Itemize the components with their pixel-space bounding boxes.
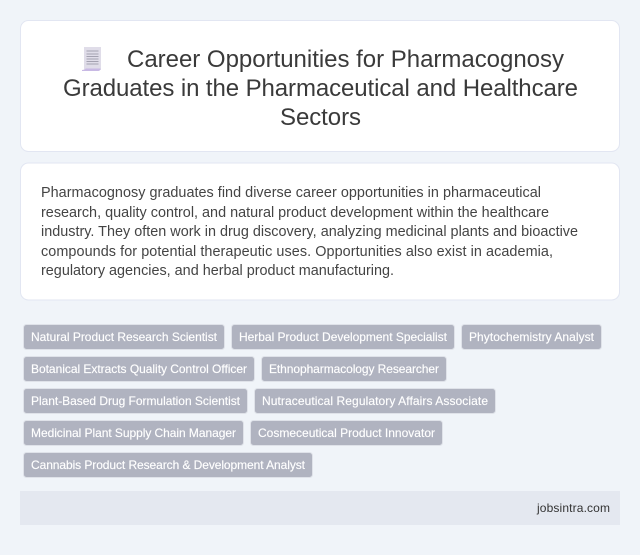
footer: jobsintra.com [536,501,610,515]
footer [20,491,620,525]
tag [24,324,224,350]
title: Career Opportunities for Pharmacognosy [127,46,564,73]
tag: Natural Product Research Scientist [31,330,218,344]
panel: description [20,163,620,300]
text block: description [41,185,578,279]
text block: description: compounds for potential therapeutic uses. Opportunities also exist in academia, [41,244,553,260]
panel: title card [20,20,620,152]
tag: Herbal Product Development Specialist [239,330,448,344]
tag [24,356,254,382]
title: Graduates in the Pharmaceutical and Healthcare [63,75,578,102]
text block: description: industry. They often work in drug discovery, analyzing medicinal plants and bioactive [41,224,578,240]
text block: description: regulatory agencies, and herbal product manufacturing. [41,263,394,279]
tag: Plant-Based Drug Formulation Scientist [31,394,241,408]
tag: Phytochemistry Analyst [469,330,595,344]
icon: paper scroll [82,47,101,71]
tag [254,388,496,414]
tag: Nutraceutical Regulatory Affairs Associate [262,394,488,408]
text block: description: research, quality control, and natural product development within the healthcare [41,205,549,221]
tag: Botanical Extracts Quality Control Officer [31,362,247,376]
tag: Ethnopharmacology Researcher [269,362,439,376]
tag [262,356,446,382]
panel: career tags [24,324,602,478]
tag: Medicinal Plant Supply Chain Manager [31,426,236,440]
tag [462,324,602,350]
tag [250,420,442,446]
tag: Cannabis Product Research & Development Analyst [31,458,306,472]
title [63,46,578,131]
tag [24,420,244,446]
text block: description: Pharmacognosy graduates find diverse career opportunities in pharmaceutical [41,185,541,201]
tag [24,388,248,414]
title: Sectors [280,104,361,131]
tag [24,452,312,478]
tag [232,324,454,350]
tag: Cosmeceutical Product Innovator [258,426,435,440]
